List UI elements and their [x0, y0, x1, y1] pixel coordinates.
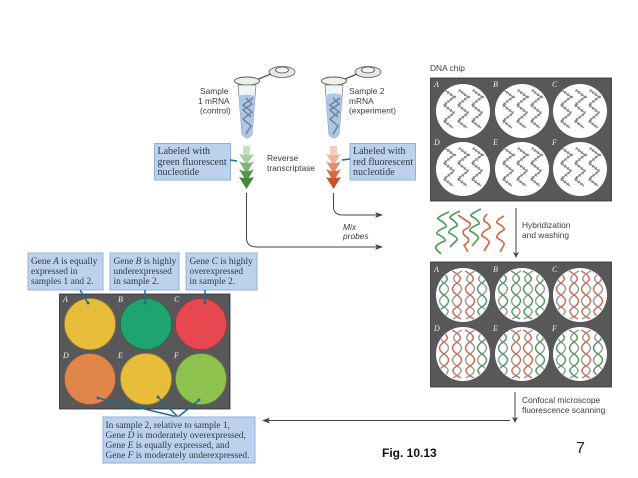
- tube: sample 2 mRNA: [322, 66, 381, 138]
- label: reverse transcriptase: Reverse: [267, 153, 299, 163]
- callout: gene A: samples 1 and 2.: [31, 277, 94, 287]
- callout: genes D E F: Gene E is equally expressed, and: [106, 441, 229, 451]
- callout: red nucleotide: red fluorescent: [353, 157, 413, 168]
- panel: hybridized chip: C: [552, 265, 558, 274]
- panel: result chip: E: [117, 351, 123, 360]
- callout: gene C: in sample 2.: [190, 277, 235, 287]
- panel: DNA chip: B: [493, 80, 498, 89]
- callout: gene A: expressed in: [31, 267, 78, 277]
- label: hybridization and washing: Hybridization: [522, 220, 571, 230]
- callout: gene C: Gene C is highly: [190, 257, 253, 267]
- label: mix probes: probes: [342, 231, 369, 241]
- panel: DNA chip: E: [492, 138, 498, 147]
- red arrow stack: [326, 146, 341, 189]
- free labeled probes: [436, 209, 504, 254]
- callout: green nucleotide: [154, 144, 237, 180]
- label: confocal microscope: Confocal microscope: [522, 395, 601, 405]
- label: reverse transcriptase: transcriptase: [267, 163, 315, 173]
- sample 1 label: 1 mRNA: [198, 96, 230, 106]
- callout: gene B: in sample 2.: [114, 277, 159, 287]
- callout: gene B: [110, 253, 179, 304]
- callout: gene A: Gene A is equally: [31, 257, 97, 267]
- label: DNA chip: DNA chip: [430, 63, 465, 73]
- panel: DNA chip: F: [551, 138, 557, 147]
- callout: genes D E F: Gene D is moderately overexpressed,: [106, 431, 246, 441]
- figure caption: Fig. 10.13: [382, 446, 437, 460]
- sample 1 label: (control): [200, 106, 231, 116]
- label: hybridization and washing: and washing: [522, 230, 569, 240]
- callout connectors: genes D E F: [96, 396, 200, 417]
- panel: hybridized chip: [430, 262, 612, 387]
- arrow: red probe to mix: [334, 193, 383, 218]
- callout: red nucleotide: [342, 144, 416, 180]
- panel: hybridized chip: D: [433, 324, 440, 333]
- arrow: to result chip: [262, 418, 510, 424]
- panel: result chip: B: [118, 295, 123, 304]
- label: confocal microscope: fluorescence scanning: [522, 405, 606, 415]
- callout: red nucleotide: nucleotide: [353, 167, 395, 178]
- panel: result chip: A: [62, 295, 68, 304]
- callout: gene B: Gene B is highly: [114, 257, 176, 267]
- callout: gene B: underexpressed: [114, 267, 172, 277]
- panel: hybridized chip: F: [551, 324, 557, 333]
- panel: DNA chip: C: [552, 80, 558, 89]
- panel: DNA chip: [430, 78, 612, 201]
- panel: result chip: C: [174, 295, 180, 304]
- panel: DNA chip: A: [433, 80, 439, 89]
- callout: genes D E F: In sample 2, relative to sample 1,: [106, 421, 230, 431]
- callout: green nucleotide: nucleotide: [158, 167, 200, 178]
- sample 2 label: mRNA: [349, 96, 374, 106]
- panel: hybridized chip: E: [492, 324, 498, 333]
- panel: result chip: F: [173, 351, 179, 360]
- callout: gene C: [186, 253, 257, 304]
- panel: hybridized chip: A: [433, 265, 439, 274]
- green arrow stack: [239, 146, 254, 189]
- panel: DNA chip: D: [433, 138, 440, 147]
- panel: result chip: [60, 294, 230, 409]
- arrow: green probe to mix: [246, 193, 383, 250]
- label: mix probes: Mix: [343, 222, 357, 232]
- callout: red nucleotide: Labeled with: [353, 146, 405, 157]
- sample 2 label: Sample 2: [349, 86, 385, 96]
- tube: sample 1 mRNA: [234, 66, 295, 138]
- page number: 7: [576, 440, 585, 457]
- sample 1 label: Sample: [200, 86, 229, 96]
- callout: gene A: [28, 253, 103, 304]
- callout: genes D E F: Gene F is moderately underexpressed.: [106, 451, 249, 461]
- callout: genes D E F: [103, 417, 255, 463]
- callout: green nucleotide: green fluorescent: [158, 157, 227, 168]
- panel: result chip: D: [62, 351, 69, 360]
- arrow: confocal scanning: [512, 392, 518, 423]
- arrow: hybridization: [513, 208, 519, 258]
- panel: hybridized chip: B: [493, 265, 498, 274]
- sample 2 label: (experiment): [349, 106, 396, 116]
- callout: gene C: overexpressed: [190, 267, 243, 277]
- callout: green nucleotide: Labeled with: [158, 146, 210, 157]
